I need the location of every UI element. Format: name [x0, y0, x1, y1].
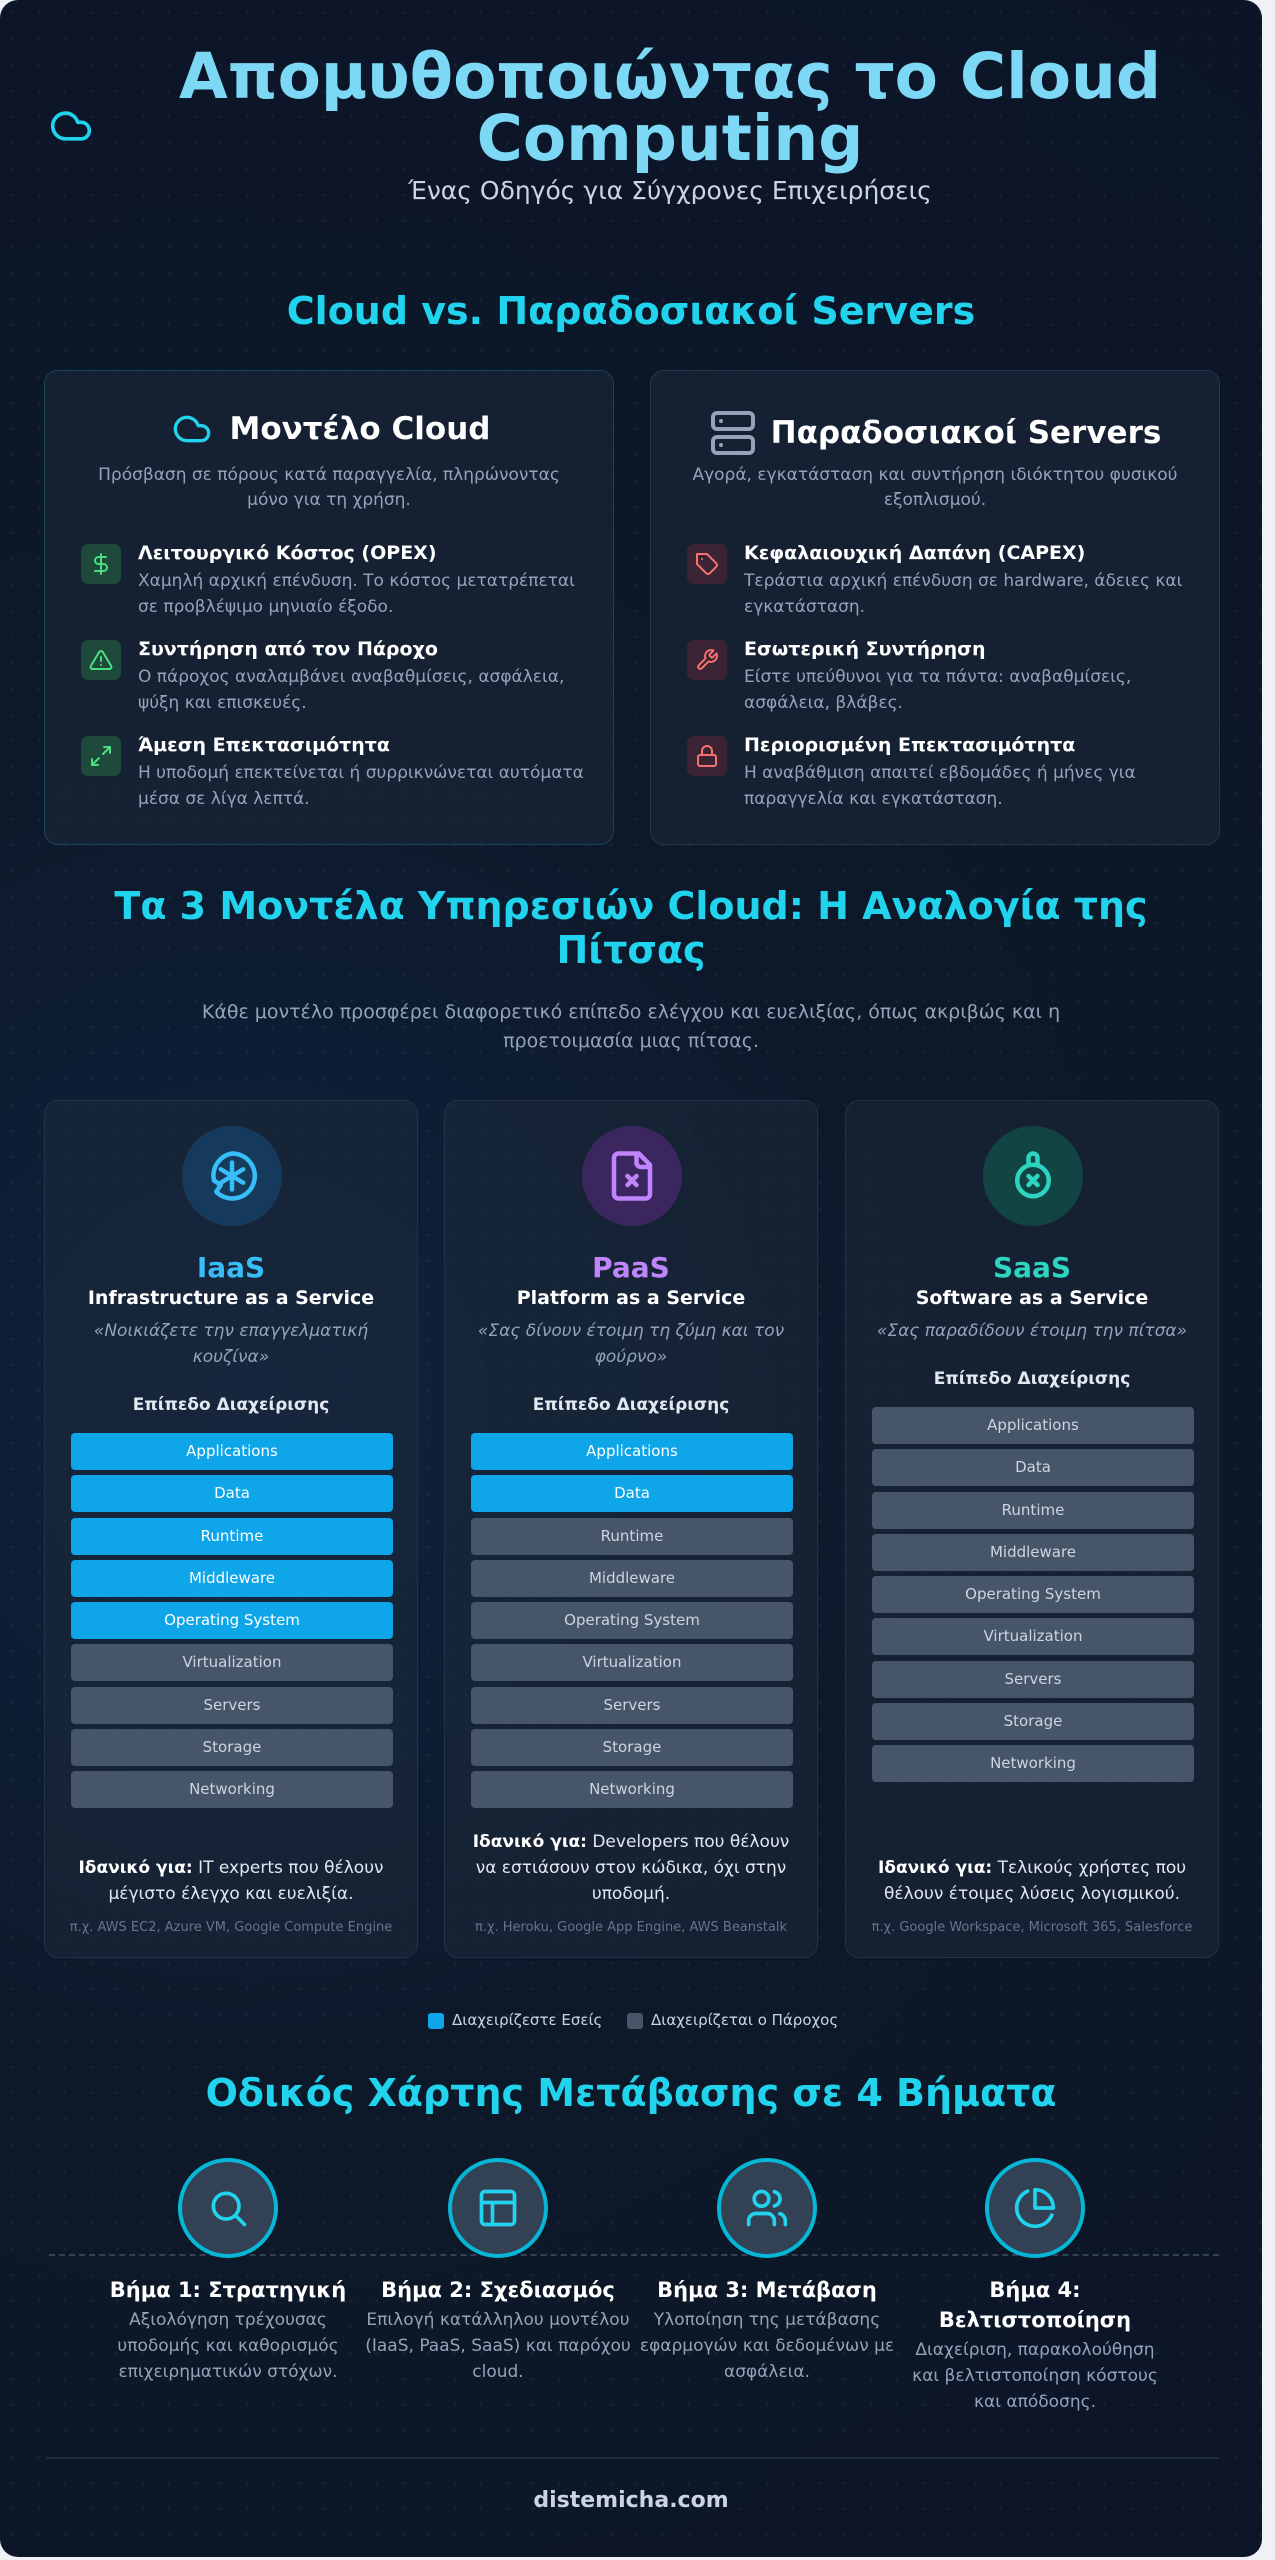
- layers stack: IaaS: Applications: [186, 1442, 278, 1460]
- title: Απομυθοποιώντας το Cloud: [179, 40, 1161, 113]
- card: IaaS: Ιδανικό για: IT experts που θέλουν: [78, 1858, 384, 1878]
- panel heading: cloud: Μοντέλο Cloud: [230, 411, 490, 447]
- item: internal maintenance: Είστε υπεύθυνοι για τα πάντα: αναβαθμίσεις,: [744, 667, 1131, 687]
- heading: comparison: Cloud vs. Παραδοσιακοί Servers: [287, 289, 975, 333]
- card: SaaS: Ιδανικό για: Τελικούς χρήστες που: [878, 1858, 1186, 1878]
- step 4 text: Βήμα 4:: [989, 2278, 1081, 2302]
- item: provider maintenance: ψύξη και επισκευές.: [138, 693, 307, 713]
- panel: cloud model: [44, 370, 614, 845]
- card: SaaS: θέλουν έτοιμες λύσεις λογισμικού.: [884, 1884, 1180, 1904]
- item: CAPEX: εγκατάσταση.: [744, 597, 865, 617]
- step 1 text: επιχειρηματικών στόχων.: [118, 2362, 338, 2382]
- step 1 text: [110, 2278, 346, 2382]
- item: provider maintenance: Συντήρηση από τον Πάροχο: [138, 638, 438, 660]
- card: PaaS: [444, 1100, 818, 1958]
- card: IaaS: π.χ. AWS EC2, Azure VM, Google Compute Engine: [70, 1920, 392, 1935]
- step 2 text: Βήμα 2: Σχεδιασμός: [381, 2278, 615, 2302]
- card: IaaS: IaaS: [197, 1251, 265, 1284]
- item: OPEX: Χαμηλή αρχική επένδυση. Το κόστος μετατρέπεται: [138, 571, 575, 591]
- step 1 text: Αξιολόγηση τρέχουσας: [129, 2310, 327, 2330]
- step 2 text: (IaaS, PaaS, SaaS) και παρόχου: [365, 2336, 631, 2356]
- layers stack: IaaS: Runtime: [201, 1527, 263, 1545]
- layers stack: IaaS: Middleware: [189, 1569, 275, 1587]
- step 4 text: [912, 2278, 1158, 2412]
- heading: service models: Τα 3 Μοντέλα Υπηρεσιών Cloud: Η Αναλογία της: [114, 884, 1148, 928]
- layers stack: PaaS: Data: [614, 1484, 650, 1502]
- layers stack: PaaS: Runtime: [601, 1527, 663, 1545]
- heading: service models: Πίτσας: [556, 928, 706, 972]
- card: IaaS: Infrastructure as a Service: [88, 1287, 374, 1309]
- step 3 text: εφαρμογών και δεδομένων με: [640, 2336, 894, 2356]
- step 2 text: [365, 2278, 631, 2382]
- step 4 text: Βελτιστοποίηση: [939, 2308, 1131, 2332]
- item: scalability: Η υποδομή επεκτείνεται ή συρρικνώνεται αυτόματα: [138, 763, 584, 783]
- layers stack: PaaS: Servers: [603, 1696, 660, 1714]
- card: PaaS: π.χ. Heroku, Google App Engine, AWS Beanstalk: [475, 1920, 787, 1935]
- layers stack: SaaS: Networking: [990, 1754, 1076, 1772]
- layers stack: SaaS: Applications: [987, 1416, 1079, 1434]
- panel description: Αγορά, εγκατάσταση και συντήρηση ιδιόκτητου φυσικού: [692, 465, 1178, 485]
- layers stack: PaaS: Networking: [589, 1780, 675, 1798]
- layers stack: IaaS: Servers: [203, 1696, 260, 1714]
- item: scalability: [81, 734, 584, 809]
- layers stack: IaaS: Networking: [189, 1780, 275, 1798]
- item: OPEX: Λειτουργικό Κόστος (OPEX): [138, 542, 437, 564]
- step icon 2: layout: [448, 2158, 548, 2258]
- legend: Διαχειρίζεται ο Πάροχος: [651, 2011, 838, 2029]
- icon: header cloud: [50, 111, 92, 141]
- panel: traditional servers: [650, 370, 1220, 845]
- icon: SaaS: [983, 1126, 1083, 1226]
- card: IaaS: Επίπεδο Διαχείρισης: [133, 1395, 329, 1415]
- legend: [428, 2011, 838, 2029]
- footer: distemicha.com: [533, 2488, 729, 2513]
- step icon 1: search: [178, 2158, 278, 2258]
- subtitle: Ένας Οδηγός για Σύγχρονες Επιχειρήσεις: [408, 176, 932, 205]
- card: PaaS: υποδομή.: [592, 1884, 670, 1904]
- layers stack: IaaS: Data: [214, 1484, 250, 1502]
- card: PaaS: Ιδανικό για: Developers που θέλουν: [473, 1832, 789, 1852]
- item: CAPEX: [687, 542, 1182, 617]
- card: SaaS: Software as a Service: [916, 1287, 1148, 1309]
- item: limited scalability: Η αναβάθμιση απαιτεί εβδομάδες ή μήνες για: [744, 763, 1136, 783]
- intro text: Κάθε μοντέλο προσφέρει διαφορετικό επίπεδο ελέγχου και ευελιξίας, όπως ακριβώς και η: [202, 1001, 1060, 1023]
- card: IaaS: μέγιστο έλεγχο και ευελιξία.: [108, 1884, 354, 1904]
- layers stack: SaaS: Virtualization: [984, 1627, 1082, 1645]
- step 1 text: Βήμα 1: Στρατηγική: [110, 2278, 346, 2302]
- layers stack: IaaS: Virtualization: [182, 1653, 281, 1671]
- card: PaaS: «Σας δίνουν έτοιμη τη ζύμη και τον: [478, 1321, 784, 1341]
- panel description: [98, 465, 560, 510]
- step icon 3: users: [717, 2158, 817, 2258]
- card: SaaS: «Σας παραδίδουν έτοιμη την πίτσα»: [877, 1321, 1187, 1341]
- layers stack: PaaS: Middleware: [589, 1569, 675, 1587]
- step 4 text: Διαχείριση, παρακολούθηση: [915, 2340, 1155, 2360]
- layers stack: SaaS: Runtime: [1002, 1501, 1064, 1519]
- step 3 text: Υλοποίηση της μετάβασης: [654, 2310, 880, 2330]
- panel description: [692, 465, 1178, 510]
- panel description: Πρόσβαση σε πόρους κατά παραγγελία, πληρώνοντας: [98, 465, 560, 485]
- card: PaaS: Επίπεδο Διαχείρισης: [533, 1395, 729, 1415]
- item: limited scalability: Περιορισμένη Επεκτασιμότητα: [744, 734, 1075, 756]
- panel description: μόνο για τη χρήση.: [247, 490, 411, 510]
- layers stack: IaaS: [71, 1433, 393, 1808]
- item: limited scalability: [687, 734, 1136, 809]
- heading: service models: [114, 884, 1148, 972]
- layers stack: IaaS: Operating System: [164, 1611, 300, 1629]
- layers stack: PaaS: Virtualization: [582, 1653, 681, 1671]
- step 2 text: Επιλογή κατάλληλου μοντέλου: [366, 2310, 630, 2330]
- layers stack: PaaS: Applications: [586, 1442, 678, 1460]
- item: internal maintenance: Εσωτερική Συντήρηση: [744, 638, 986, 660]
- card: IaaS: «Νοικιάζετε την επαγγελματική: [94, 1321, 368, 1341]
- item: internal maintenance: [687, 638, 1131, 713]
- item: provider maintenance: Ο πάροχος αναλαμβάνει αναβαθμίσεις, ασφάλεια,: [138, 667, 564, 687]
- intro text: προετοιμασία μιας πίτσας.: [503, 1030, 759, 1052]
- title: [179, 40, 1161, 175]
- item: OPEX: σε προβλέψιμο μηνιαίο έξοδο.: [138, 597, 393, 617]
- step icon 4: pie chart: [985, 2158, 1085, 2258]
- item: scalability: μέσα σε λίγα λεπτά.: [138, 789, 310, 809]
- heading: roadmap: Οδικός Χάρτης Μετάβασης σε 4 Βήματα: [206, 2071, 1056, 2115]
- step 3 text: Βήμα 3: Μετάβαση: [657, 2278, 877, 2302]
- icon: PaaS: [582, 1126, 682, 1226]
- card: SaaS: Επίπεδο Διαχείρισης: [934, 1369, 1130, 1389]
- card: SaaS: π.χ. Google Workspace, Microsoft 365, Salesforce: [872, 1920, 1192, 1935]
- layers stack: SaaS: Middleware: [990, 1543, 1076, 1561]
- item: OPEX: [81, 542, 575, 617]
- card: PaaS: φούρνο»: [595, 1347, 667, 1367]
- card: PaaS: να εστιάσουν στον κώδικα, όχι στην: [476, 1858, 786, 1878]
- layers stack: PaaS: Storage: [603, 1738, 661, 1756]
- icon: IaaS: [182, 1126, 282, 1226]
- title: Computing: [477, 102, 863, 175]
- layers stack: SaaS: Operating System: [965, 1585, 1101, 1603]
- card: SaaS: SaaS: [993, 1251, 1071, 1284]
- card: PaaS: Platform as a Service: [517, 1287, 745, 1309]
- step 2 text: cloud.: [472, 2362, 524, 2382]
- step 1 text: υποδομής και καθορισμός: [117, 2336, 339, 2356]
- item: CAPEX: Κεφαλαιουχική Δαπάνη (CAPEX): [744, 542, 1085, 564]
- layers stack: IaaS: Storage: [203, 1738, 261, 1756]
- card: IaaS: κουζίνα»: [193, 1347, 269, 1367]
- layers stack: PaaS: [471, 1433, 793, 1808]
- panel heading: servers: Παραδοσιακοί Servers: [771, 415, 1161, 451]
- step 3 text: ασφάλεια.: [724, 2362, 810, 2382]
- item: scalability: Άμεση Επεκτασιμότητα: [138, 734, 390, 756]
- item: limited scalability: παραγγελία και εγκατάσταση.: [744, 789, 1003, 809]
- intro text: [202, 1001, 1060, 1052]
- panel description: εξοπλισμού.: [884, 490, 986, 510]
- layers stack: PaaS: Operating System: [564, 1611, 700, 1629]
- layers stack: SaaS: [872, 1407, 1194, 1782]
- layers stack: SaaS: Data: [1015, 1458, 1051, 1476]
- layers stack: SaaS: Servers: [1004, 1670, 1062, 1688]
- layers stack: SaaS: Storage: [1004, 1712, 1062, 1730]
- step 3 text: [640, 2278, 894, 2382]
- item: CAPEX: Τεράστια αρχική επένδυση σε hardware, άδειες και: [744, 571, 1182, 591]
- card: SaaS: [845, 1100, 1219, 1958]
- card: PaaS: PaaS: [592, 1251, 670, 1284]
- legend: Διαχειρίζεστε Εσείς: [452, 2011, 602, 2029]
- item: internal maintenance: ασφάλεια, βλάβες.: [744, 693, 903, 713]
- step 4 text: και απόδοσης.: [974, 2392, 1096, 2412]
- item: provider maintenance: [81, 638, 564, 713]
- step 4 text: και βελτιστοποίηση κόστους: [912, 2366, 1158, 2386]
- card: IaaS: [44, 1100, 418, 1958]
